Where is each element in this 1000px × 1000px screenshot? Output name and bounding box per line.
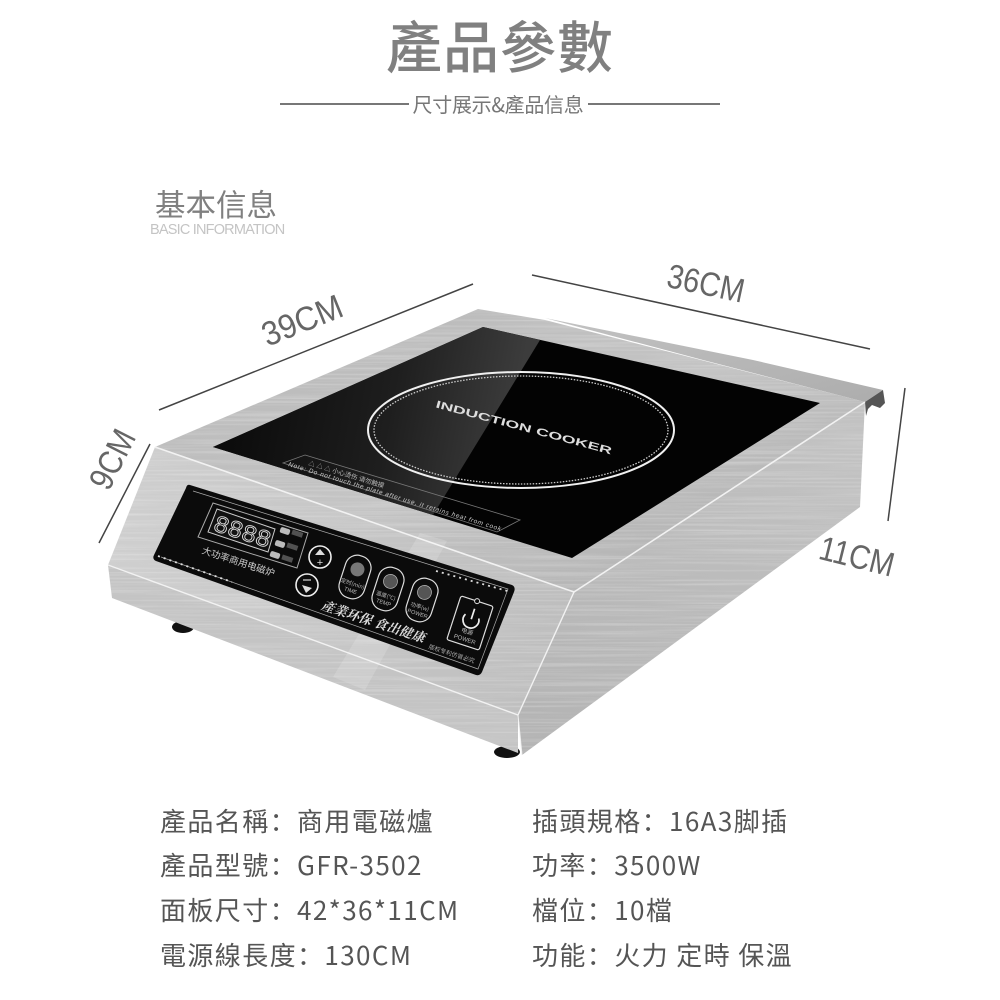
- panel dotted decorations: [158, 556, 511, 592]
- top surface: [155, 309, 865, 592]
- indicator labels: [269, 527, 303, 563]
- display frame: [198, 503, 308, 568]
- timer button: TIME: [343, 586, 358, 596]
- warning strip: Note: Do not touch the plate after use, it retains heat from cook: [287, 461, 503, 533]
- panel plate: [153, 485, 515, 675]
- heading: basic information: 基本信息: [155, 181, 277, 225]
- plus button: +: [317, 557, 323, 569]
- warning strip: △ △ △ 小心烫伤 请勿触摸: [307, 458, 386, 490]
- edge highlights: [108, 402, 865, 755]
- dimension label: 11CM: 11CM: [815, 529, 898, 585]
- english heading: basic information: BASIC INFORMATION: [150, 222, 284, 238]
- minus button: [296, 574, 318, 596]
- dimension line: 39CM: [159, 284, 473, 410]
- feet: [172, 621, 520, 758]
- temperature button: 温度(℃): [375, 589, 397, 603]
- front lower face: [108, 565, 518, 753]
- product illustration with dimensions: [90, 264, 906, 758]
- brushed steel texture: [100, 300, 880, 760]
- power button: POWER: [453, 634, 477, 647]
- spec: model: 產品型號：GFR-3502: [160, 846, 423, 883]
- spec: panel size: 面板尺寸：42*36*11CM: [160, 891, 460, 928]
- spec: levels: 檔位：10檔: [532, 891, 673, 928]
- temperature button: TEMP: [375, 598, 392, 609]
- power level button: POWER: [407, 608, 428, 620]
- reflection band on front: [333, 533, 447, 690]
- panel small print: 版权专利仿冒必究: [428, 642, 476, 665]
- panel product name: 大功率商用电磁炉: [200, 543, 277, 580]
- back lip: [545, 318, 883, 402]
- cooktop label: INDUCTION COOKER: [434, 399, 614, 457]
- front slanted face: [108, 447, 574, 715]
- lip hook: [865, 390, 885, 416]
- title: 產品參數: [386, 4, 614, 85]
- spec: power: 功率：3500W: [532, 846, 702, 883]
- glass reflection: [213, 327, 540, 515]
- spec: cord length: 電源線長度：130CM: [160, 936, 412, 973]
- power level button: [403, 575, 441, 625]
- dimension line: 36CM: [532, 275, 870, 349]
- glass cooktop: [213, 327, 820, 558]
- cooking zone ring: [368, 372, 674, 488]
- subtitle with side rules: 尺寸展示&產品信息: [413, 89, 583, 118]
- right side face: [518, 402, 865, 755]
- induction cooker: [100, 300, 885, 760]
- panel slogan: 產業环保 食出健康: [319, 595, 430, 647]
- dimension line: 11CM: [888, 388, 905, 521]
- temperature button: [369, 564, 407, 614]
- display digits: 8888: [210, 511, 274, 555]
- dimension label: 39CM: 39CM: [256, 288, 348, 354]
- dimension label: 9CM: 9CM: [82, 423, 144, 496]
- timer button: 定时(min): [340, 576, 366, 591]
- dimension label: 36CM: 36CM: [664, 257, 748, 311]
- plus button: [309, 546, 331, 569]
- spec: functions: 功能：火力 定時 保溫: [532, 936, 793, 973]
- power level button: 功率(w): [409, 600, 430, 613]
- dimension line: 9CM: [99, 444, 150, 543]
- spec: plug: 插頭規格：16A3脚插: [532, 802, 788, 839]
- power button: [447, 593, 494, 650]
- power button: 电源: [460, 625, 474, 637]
- timer button: [336, 552, 374, 602]
- control panel: [153, 485, 515, 675]
- spec: product name: 產品名稱：商用電磁爐: [160, 802, 434, 839]
